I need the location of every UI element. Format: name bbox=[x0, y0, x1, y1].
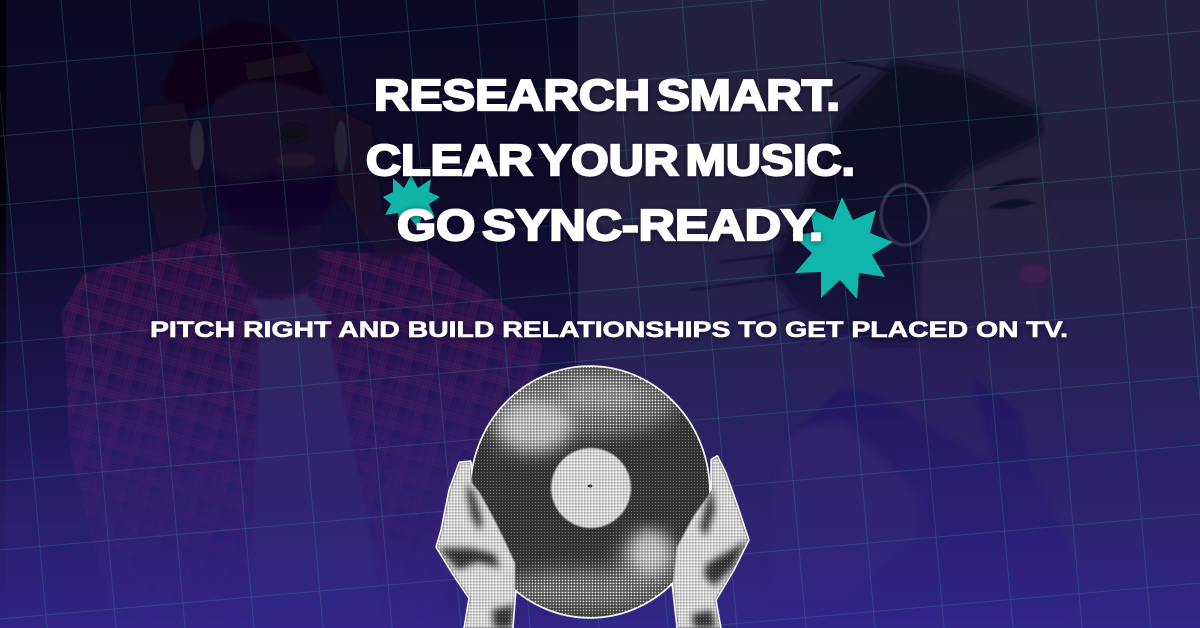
eye and brow bbox=[990, 179, 1040, 208]
face bbox=[208, 52, 336, 228]
heading line 1: RESEARCH SMART. bbox=[374, 71, 840, 120]
vinyl and hands halftone bbox=[430, 360, 760, 628]
dress bbox=[770, 376, 1082, 628]
lips bbox=[276, 153, 316, 167]
photo: man wearing headphones bbox=[61, 20, 543, 628]
left hand bbox=[138, 103, 207, 247]
beard bbox=[214, 165, 336, 233]
heading bbox=[366, 71, 855, 250]
neck and chest bbox=[849, 300, 1040, 464]
hair strands bbox=[690, 60, 900, 345]
headphone ring bbox=[881, 185, 929, 245]
icon: halftone hands holding vinyl record bbox=[430, 360, 760, 628]
right hand bbox=[329, 103, 421, 258]
face bbox=[918, 140, 1061, 320]
t-shirt bbox=[249, 293, 383, 628]
shoulder bbox=[770, 422, 918, 600]
heading line 2: CLEAR YOUR MUSIC. bbox=[366, 136, 855, 185]
star: small teal burst bbox=[383, 175, 440, 228]
photo: woman wearing headphones bbox=[690, 60, 1082, 628]
subheading: PITCH RIGHT AND BUILD RELATIONSHIPS TO GET PLACED ON TV. bbox=[150, 317, 1068, 342]
cap bbox=[161, 20, 325, 115]
lips bbox=[1019, 265, 1049, 283]
star: large teal burst bbox=[792, 197, 893, 299]
cap strap bbox=[245, 52, 314, 80]
nose bbox=[279, 124, 307, 142]
headphone cups bbox=[190, 120, 204, 170]
neck bbox=[218, 225, 321, 296]
hair bbox=[768, 60, 1042, 345]
shirt bbox=[61, 232, 543, 628]
heading line 3: GO SYNC-READY. bbox=[397, 201, 823, 250]
white cut-out outline bbox=[437, 367, 748, 628]
